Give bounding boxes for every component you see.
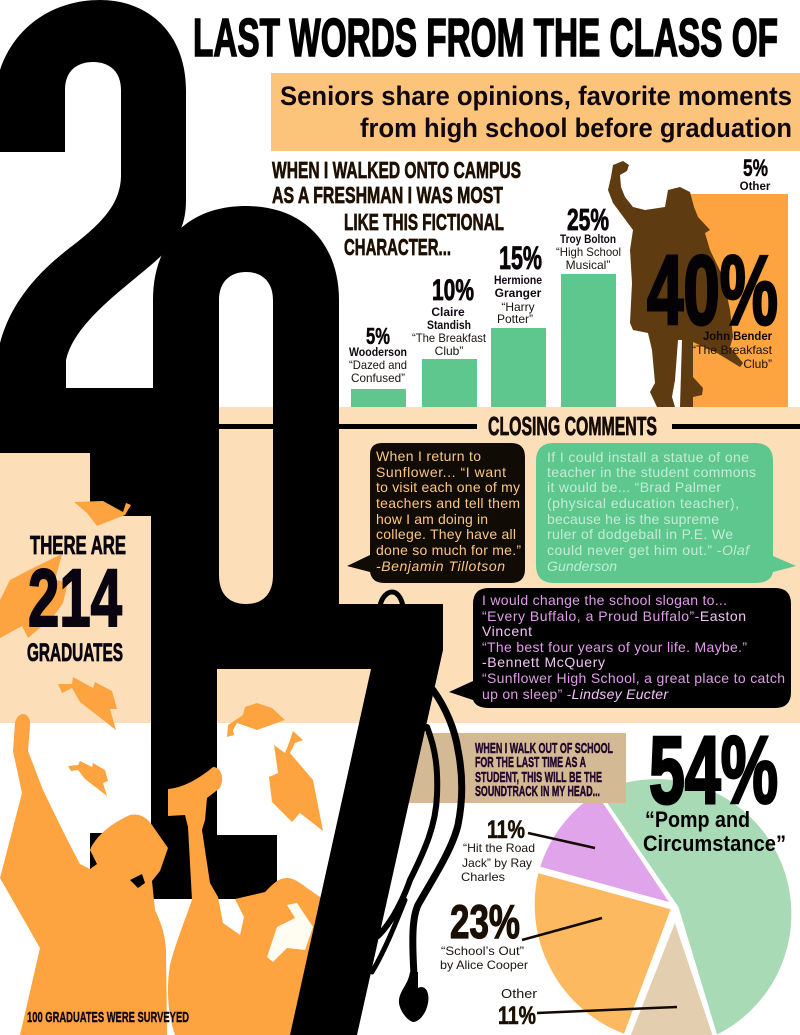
label: 11% Hit the Road Jack: Charles bbox=[461, 870, 505, 884]
label: 11% Hit the Road Jack bbox=[461, 816, 595, 884]
speech bubble: Benjamin Tillotson: to visit each one of my bbox=[376, 479, 520, 495]
stat: 214 graduates: GRADUATES bbox=[27, 639, 123, 667]
icon: Bender fist raised silhouette bbox=[608, 161, 743, 407]
label: 11% Hit the Road Jack: Jack” by Ray bbox=[462, 856, 532, 870]
bar: John Bender 40% with silhouette: John Bender bbox=[703, 329, 772, 343]
cap large left bbox=[0, 554, 68, 638]
big digit 0 bbox=[153, 206, 339, 606]
bar: Claire Standish 10%: Claire bbox=[431, 305, 465, 319]
speech bubble: school slogans bbox=[449, 588, 791, 708]
falling graduation caps bbox=[0, 501, 323, 831]
speech bubble: school slogans: Vincent bbox=[482, 623, 532, 639]
label: 11% Hit the Road Jack: 11% bbox=[487, 816, 525, 844]
freshman question heading: WHEN I WALKED ONTO CAMPUS bbox=[272, 157, 521, 183]
soundtrack question box: SOUNDTRACK IN MY HEAD... bbox=[475, 783, 600, 800]
label: other 5%: Other bbox=[740, 181, 771, 193]
label: 54% Pomp and Circumstance: “Pomp and bbox=[645, 807, 750, 832]
speech bubble: Benjamin Tillotson: Sunflower... “I want bbox=[376, 464, 506, 480]
cap small bbox=[68, 761, 108, 796]
big digit 1 bbox=[0, 388, 277, 899]
bar: Hermione Granger 15%: “Harry bbox=[501, 300, 535, 314]
freshman question heading bbox=[272, 157, 521, 260]
speech bubble: Benjamin Tillotson: how I am doing in bbox=[376, 511, 488, 527]
cap level bbox=[227, 703, 285, 737]
speech bubble: school slogans: “The best four years of your life. Maybe.” bbox=[482, 639, 747, 655]
stat: 214 graduates: 214 bbox=[28, 553, 122, 644]
bar: Wooderson 5%: “Dazed and bbox=[349, 358, 407, 372]
speech bubble: school slogans: -Bennett McQuery bbox=[482, 654, 605, 670]
label: 11% Hit the Road Jack: “Hit the Road bbox=[463, 841, 535, 855]
leader line bbox=[522, 918, 602, 940]
stat: 214 graduates: THERE ARE bbox=[30, 530, 126, 560]
speech bubble: Olaf Gunderson: (physical education teacher), bbox=[547, 495, 739, 511]
earbud bbox=[399, 972, 428, 1022]
speech bubble: Olaf Gunderson bbox=[536, 443, 796, 583]
bar: Troy Bolton 25%: Musical” bbox=[566, 258, 610, 272]
big digit 7 bbox=[207, 604, 443, 1035]
speech bubble: Benjamin Tillotson: When I return to bbox=[376, 448, 481, 464]
label: 54% Pomp and Circumstance: Circumstance” bbox=[643, 831, 786, 856]
graduate silhouette left bbox=[0, 714, 168, 1035]
bar: John Bender 40% with silhouette: Club” bbox=[743, 357, 772, 371]
bar: John Bender 40% with silhouette bbox=[608, 161, 788, 407]
bar: Claire Standish 10%: Standish bbox=[427, 318, 471, 332]
freshman question heading: LIKE THIS FICTIONAL bbox=[344, 209, 504, 235]
survey note: 100 GRADUATES WERE SURVEYED bbox=[27, 1009, 189, 1026]
stat: 214 graduates bbox=[27, 530, 126, 667]
speech bubble: Benjamin Tillotson: teachers and tell them bbox=[376, 495, 520, 511]
speech bubble: Olaf Gunderson: could never get him out.” -Olaf bbox=[547, 542, 751, 558]
label: 54% Pomp and Circumstance bbox=[643, 717, 786, 856]
speech bubble: school slogans: “Sunflower High School, a great place to catch bbox=[482, 670, 785, 686]
closing comments heading: CLOSING COMMENTS bbox=[488, 411, 657, 441]
bar: Troy Bolton 25%: “High School bbox=[556, 245, 621, 259]
speech bubble: school slogans: “Every Buffalo, a Proud Buffalo”-Easton bbox=[482, 608, 746, 624]
bar: Claire Standish 10%: Club” bbox=[435, 344, 463, 358]
bar: Hermione Granger 15%: 15% bbox=[499, 240, 542, 276]
bar: Hermione Granger 15%: Potter” bbox=[497, 312, 533, 326]
leader line bbox=[537, 1007, 677, 1013]
speech bubble: Olaf Gunderson: Gunderson bbox=[547, 558, 617, 574]
soundtrack question box: FOR THE LAST TIME AS A bbox=[475, 754, 586, 771]
bar: Hermione Granger 15%: Granger bbox=[495, 286, 542, 300]
graduate silhouette right with megaphone bbox=[168, 767, 325, 1035]
speech bubble: Olaf Gunderson: ruler of dodgeball in P.E. We bbox=[547, 526, 733, 542]
slice: Pomp and Circumstance 54% bbox=[597, 777, 793, 1035]
speech bubble: Benjamin Tillotson: college. They have all bbox=[376, 526, 516, 542]
bar: Troy Bolton 25% bbox=[556, 202, 621, 407]
label: Other 11%: 11% bbox=[498, 1002, 536, 1030]
speech bubble: Olaf Gunderson: If I could install a statue of one bbox=[547, 449, 749, 465]
label: 23% School's Out: “School’s Out” bbox=[441, 944, 524, 958]
closing comments rule bbox=[200, 424, 800, 429]
speech bubble: Benjamin Tillotson: done so much for me.” bbox=[376, 542, 521, 558]
big digit 2 bbox=[0, 0, 186, 453]
bar: Troy Bolton 25%: 25% bbox=[567, 202, 609, 237]
bar: Wooderson 5%: Confused” bbox=[351, 371, 405, 385]
freshman question heading: AS A FRESHMAN I WAS MOST bbox=[272, 182, 503, 208]
label: Other 11%: Other bbox=[501, 987, 537, 1001]
cap right tilted bbox=[269, 731, 323, 831]
bar chart: fictional characters bbox=[349, 155, 788, 407]
bar: Wooderson 5% bbox=[349, 323, 407, 407]
label: 23% School's Out: by Alice Cooper bbox=[440, 958, 528, 972]
soundtrack question box: STUDENT, THIS WILL BE THE bbox=[475, 769, 602, 786]
bar: Hermione Granger 15% bbox=[491, 240, 546, 407]
bar: Claire Standish 10%: 10% bbox=[432, 274, 474, 307]
bar: Claire Standish 10%: “The Breakfast bbox=[412, 331, 487, 345]
bar: Wooderson 5%: 5% bbox=[366, 323, 390, 349]
bar: Troy Bolton 25%: Troy Bolton bbox=[560, 232, 616, 246]
label: other 5%: 5% bbox=[743, 155, 768, 182]
slice: Other 11% bbox=[627, 918, 716, 1035]
speech bubble: Olaf Gunderson: it would be... “Brad Palmer bbox=[547, 479, 721, 495]
slice: School's Out 23% bbox=[533, 871, 673, 1035]
speech bubble: Olaf Gunderson: teacher in the student commons bbox=[547, 464, 756, 480]
cap top bbox=[74, 501, 131, 526]
bar: Claire Standish 10% bbox=[412, 274, 487, 407]
label: 23% School's Out bbox=[440, 895, 602, 972]
speech bubble: Benjamin Tillotson: -Benjamin Tillotson bbox=[376, 558, 505, 574]
speech bubble: Olaf Gunderson: because he is the supreme bbox=[547, 511, 719, 527]
soundtrack question box bbox=[400, 733, 626, 803]
bar: Wooderson 5%: Wooderson bbox=[349, 347, 407, 359]
label: other 5% bbox=[740, 155, 771, 193]
speech bubble: school slogans: up on sleep” -Lindsey Eucter bbox=[482, 686, 669, 702]
label: 23% School's Out: 23% bbox=[450, 895, 520, 948]
subtitle banner bbox=[271, 73, 800, 151]
soundtrack question box: WHEN I WALK OUT OF SCHOOL bbox=[475, 740, 613, 757]
bar: John Bender 40% with silhouette: “The Breakfast bbox=[692, 343, 773, 357]
label: Other 11% bbox=[498, 987, 677, 1030]
speech bubble: Benjamin Tillotson bbox=[347, 443, 525, 583]
cap middle bbox=[58, 677, 117, 730]
speech bubble: school slogans: I would change the school slogan to... bbox=[482, 592, 727, 608]
leader line bbox=[528, 833, 595, 848]
pie chart: senior soundtrack bbox=[533, 777, 793, 1035]
freshman question heading: CHARACTER... bbox=[344, 234, 451, 260]
slice: Hit the Road Jack 11% bbox=[538, 791, 673, 905]
closing comments background band bbox=[0, 407, 800, 723]
bar: Hermione Granger 15%: Hermione bbox=[494, 273, 542, 287]
headphone wire and earbud bbox=[372, 592, 462, 1022]
